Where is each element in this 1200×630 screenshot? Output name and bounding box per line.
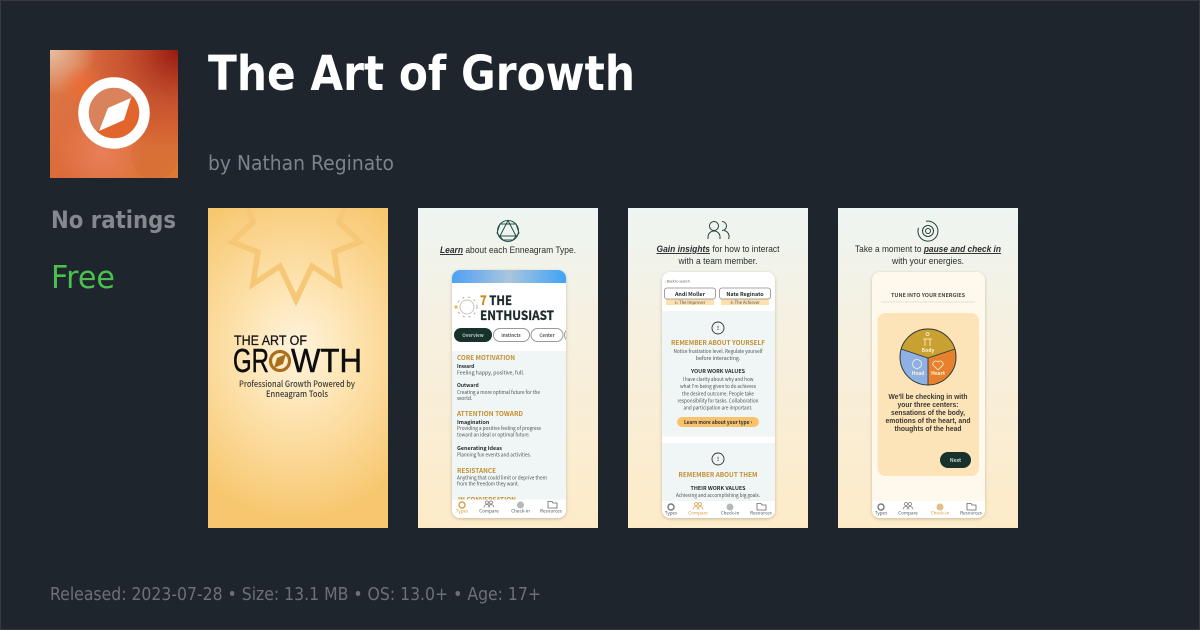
screenshot 2: enneagram type: CORE MOTIVATION	[457, 353, 515, 362]
panel: remember about yourself: what I'm being given to do achieves	[680, 383, 757, 390]
screenshot 2: enneagram type: Creating a more optimal future for the	[457, 389, 540, 396]
panel: remember about yourself: REMEMBER ABOUT YOURSELF	[671, 338, 765, 347]
developer: by Nathan Reginato	[208, 151, 394, 175]
screenshot 2: enneagram type: Generating Ideas	[457, 444, 502, 452]
tagline: Enneagram Tools	[266, 388, 328, 400]
bottom nav: Check-in	[931, 510, 949, 516]
panel: remember about yourself	[662, 311, 775, 436]
heading: Gain insights for how to interact	[656, 244, 780, 255]
screenshot 2: enneagram type: world.	[457, 395, 473, 402]
bottom nav: Resources	[960, 510, 982, 516]
team member names: 3: The Achiever	[730, 300, 760, 306]
three centers wheel	[900, 328, 956, 385]
screenshot 2: enneagram type: toward an ideal or optimal future.	[457, 432, 530, 438]
bottom nav: Types	[665, 510, 677, 516]
heading	[656, 244, 780, 267]
screenshot 2: enneagram type: Feeling happy, positive, full.	[457, 370, 525, 376]
app icon: compass	[50, 50, 179, 179]
footer metadata: Released: 2023-07-28 • Size: 13.1 MB • OS: 13.0+ • Age: 17+	[50, 584, 541, 605]
screenshot 2: enneagram type: ATTENTION TOWARD	[456, 409, 523, 418]
screenshot 2: enneagram type: Providing a positive feeling of progress	[457, 425, 542, 432]
three centers wheel: Heart	[931, 370, 946, 377]
panel: remember about them	[662, 443, 775, 503]
screenshot 4: check in: TUNE INTO YOUR ENERGIES	[891, 292, 965, 299]
bottom nav: Types	[456, 508, 468, 514]
sun outline	[232, 204, 360, 300]
next button: Next	[950, 457, 962, 464]
screenshot 2: enneagram type: Inward	[457, 363, 474, 370]
screenshot 2: enneagram type: Outward	[457, 382, 479, 389]
panel: remember about them: !	[717, 455, 719, 463]
team member names: 1: The Improver	[675, 300, 706, 306]
tabs: Overview	[462, 332, 484, 339]
panel: remember about yourself: YOUR WORK VALUES	[690, 368, 746, 375]
panel: remember about yourself: I have clarity about why and how	[682, 376, 754, 383]
tabs	[454, 328, 566, 342]
screenshot 4: check in	[838, 208, 1018, 528]
heading: with a team member.	[678, 256, 758, 267]
bottom nav: Compare	[479, 508, 499, 514]
description: thoughts of the head	[894, 424, 962, 433]
panel: remember about them: Achieving and accomplishing big goals.	[676, 492, 760, 499]
team member names: Nate Reginato	[726, 290, 764, 298]
screenshot 2: enneagram type: IN CONVERSATION	[458, 495, 516, 504]
panel: remember about yourself: !	[717, 324, 719, 332]
panel: remember about them: REMEMBER ABOUT THEM	[678, 470, 758, 479]
team member names: Andi Moller	[674, 290, 706, 298]
type wheel	[457, 297, 477, 317]
screenshot 2: enneagram type: Anything that could limit or deprive them	[457, 474, 547, 482]
price: Free	[51, 260, 115, 296]
bottom nav	[872, 501, 985, 519]
icon: enneagram	[497, 220, 519, 242]
screenshot 2: enneagram type	[418, 208, 598, 528]
description: your three centers:	[898, 400, 958, 409]
screenshot 2: enneagram type: from the freedom they want.	[457, 480, 519, 488]
panel: remember about yourself: the desired outcome. People take	[682, 390, 754, 398]
logo	[234, 335, 360, 372]
heading: Take a moment to pause and check in	[855, 244, 1001, 255]
tagline: Professional Growth Powered by	[239, 378, 355, 390]
screenshot 2: enneagram type: Imagination	[457, 418, 490, 426]
panel: remember about them: THEIR WORK VALUES	[690, 485, 746, 492]
panel: remember about yourself: Learn more about your type ›	[684, 418, 752, 426]
icon: concentric circles	[918, 221, 938, 241]
tagline	[240, 380, 355, 399]
panel: remember about yourself: before interacting.	[696, 355, 741, 362]
screenshot 2: enneagram type: ENTHUSIAST	[480, 305, 554, 324]
title: The Art of Growth	[208, 46, 635, 102]
rating: No ratings	[51, 206, 176, 234]
bottom nav: Compare	[688, 510, 708, 516]
screenshot 3: team insights: ‹ Back to search	[665, 278, 690, 284]
three centers wheel: Head	[912, 370, 924, 377]
logo: THE ART OF	[234, 333, 307, 348]
icon: people	[708, 222, 729, 239]
bottom nav	[662, 501, 775, 519]
screenshot 2: enneagram type: RESISTANCE	[457, 466, 496, 475]
heading: Learn about each Enneagram Type.	[440, 245, 576, 256]
phone card	[452, 270, 566, 518]
screenshot 3: team insights	[628, 208, 808, 528]
next button	[940, 452, 971, 468]
phone card	[662, 272, 775, 518]
description	[886, 392, 971, 433]
panel: remember about yourself: and participation are important.	[684, 404, 753, 412]
team member names	[664, 288, 770, 306]
description: emotions of the heart, and	[886, 416, 971, 425]
bottom nav: Check-in	[721, 510, 739, 516]
bottom nav	[452, 500, 566, 518]
heading: with your energies.	[891, 256, 964, 267]
bottom nav: Types	[875, 510, 887, 516]
bottom nav: Compare	[898, 510, 918, 516]
description: sensations of the body,	[891, 408, 965, 417]
heading	[855, 244, 1001, 267]
logo: WTH	[291, 342, 362, 379]
bottom nav: Resources	[540, 508, 562, 514]
screenshot 2: enneagram type: Planning fun events and activities.	[457, 452, 531, 458]
energy panel	[878, 313, 979, 476]
bottom nav: Resources	[750, 510, 772, 516]
bottom nav: Check-in	[511, 508, 530, 514]
type title: 7 THE	[480, 290, 512, 309]
tabs: Center	[539, 333, 555, 339]
panel: remember about yourself: Notice frustration level. Regulate yourself	[674, 348, 763, 355]
phone card	[872, 272, 985, 518]
screenshot 1: splash screen	[208, 204, 388, 528]
description: We'll be checking in with	[888, 392, 968, 401]
three centers wheel: Body	[922, 347, 934, 354]
logo: GR	[233, 342, 269, 379]
tabs: Instincts	[501, 332, 521, 339]
panel: remember about yourself: responsibility for tasks. Collaboration	[678, 398, 758, 404]
type content	[452, 351, 566, 501]
